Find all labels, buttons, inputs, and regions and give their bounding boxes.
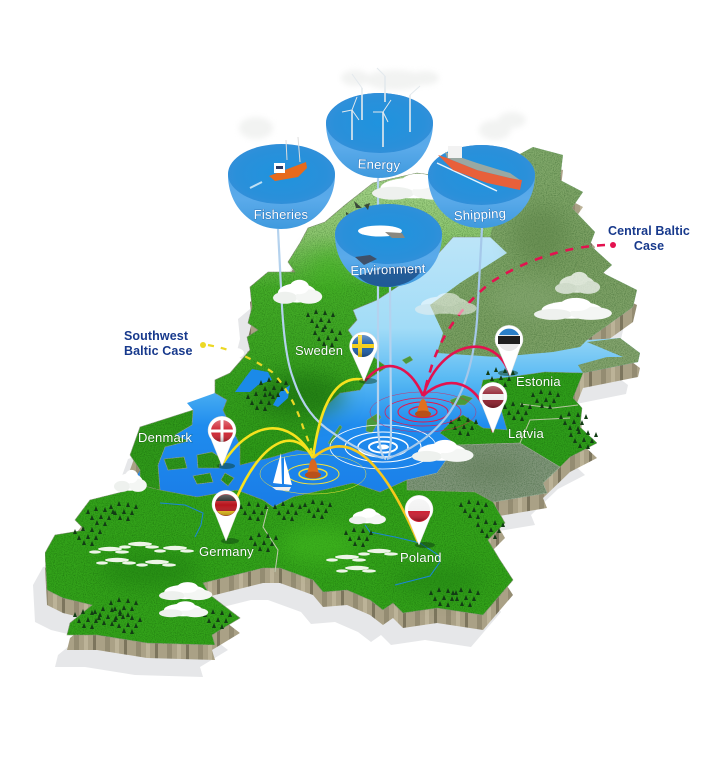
map base walls <box>45 162 640 660</box>
pin: Denmark <box>208 416 236 469</box>
rivers and borders <box>160 404 578 585</box>
land: Sweden <box>215 170 510 465</box>
dot: Southwest Baltic Case <box>200 342 206 348</box>
icon: cargo ship <box>437 146 522 191</box>
sonar rings: yellow <box>260 454 366 494</box>
dot: Central Baltic Case <box>610 242 616 248</box>
sphere: Energy: Energy <box>358 156 401 173</box>
pin: Sweden <box>350 332 378 384</box>
tube: Fisheries <box>278 229 383 458</box>
pin: Latvia <box>479 382 507 433</box>
pin: Poland <box>405 495 435 548</box>
sphere: Shipping: Shipping <box>454 206 506 223</box>
icon: seal splash <box>355 226 405 265</box>
labels: countries: Latvia <box>508 426 544 441</box>
sphere: Energy <box>326 68 433 178</box>
buoy: yellow <box>305 459 321 478</box>
forests <box>73 309 598 634</box>
sphere: Environment <box>335 204 442 287</box>
pin: Germany <box>212 490 240 544</box>
lakes <box>235 369 290 407</box>
sonar rings: white <box>330 425 436 469</box>
land: Danish islands <box>164 452 234 486</box>
dashed route: Southwest Baltic Case <box>208 345 312 453</box>
speckled cloud on dashed route <box>228 348 244 358</box>
labels: countries: Poland <box>400 550 442 565</box>
sphere: Fisheries: Fisheries <box>254 207 309 222</box>
sea surface <box>45 147 640 645</box>
clouds above spheres <box>239 70 526 140</box>
label: Southwest Baltic Case: Southwest <box>124 329 189 343</box>
labels: countries: Estonia <box>516 374 561 389</box>
labels: countries: Sweden <box>295 343 343 358</box>
land: Baltic states <box>440 372 597 467</box>
label: Central Baltic Case: Case <box>634 239 664 253</box>
icon: fishing boat <box>250 137 307 188</box>
sailboat <box>272 453 292 491</box>
islands <box>328 356 473 445</box>
land: Finland <box>430 147 637 357</box>
land surfaces <box>45 147 640 645</box>
labels: countries <box>138 343 561 565</box>
clouds <box>89 174 612 617</box>
birds <box>346 201 370 215</box>
label: Central Baltic Case: Central Baltic <box>608 224 690 238</box>
label: Southwest Baltic Case: Baltic Case <box>124 344 192 358</box>
sphere: Environment: Environment <box>350 261 426 278</box>
labels: countries: Germany <box>199 544 254 559</box>
tube: Energy <box>378 178 386 459</box>
dashed route: Central Baltic Case <box>424 245 605 396</box>
land: Germany and Poland <box>45 480 513 645</box>
red arcs <box>365 347 510 432</box>
sonar rings: red <box>370 392 476 432</box>
land: Denmark and Jutland <box>130 410 193 490</box>
tube: Environment <box>387 287 391 459</box>
label: Central Baltic Case <box>608 224 690 253</box>
ground shadow <box>33 179 628 677</box>
icon: wind turbines <box>342 68 420 147</box>
sphere: Fisheries <box>228 137 335 229</box>
land: Belarus and Russia <box>407 443 560 502</box>
tube: Shipping <box>387 228 482 459</box>
labels: countries: Denmark <box>138 430 192 445</box>
sphere: Shipping <box>428 145 535 228</box>
land: Russia north-east <box>578 338 640 373</box>
land shading <box>100 205 570 594</box>
label: Southwest Baltic Case <box>124 329 192 358</box>
buoy: red <box>415 399 431 418</box>
pin: Estonia <box>495 325 523 376</box>
yellow arcs <box>222 379 418 542</box>
